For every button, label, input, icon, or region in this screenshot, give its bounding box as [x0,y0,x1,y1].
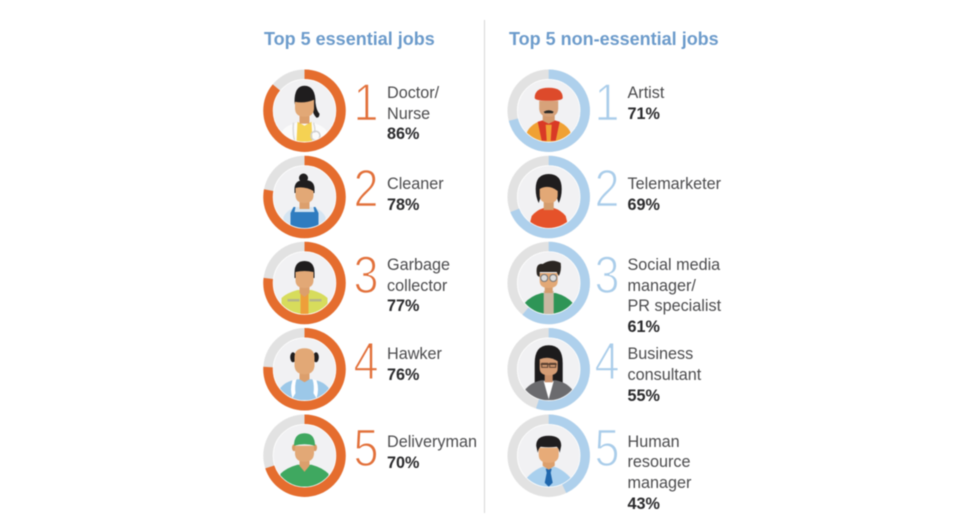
label: doctor/nurse: Nurse [387,105,430,123]
icon: social media manager [525,261,573,314]
label: social media manager/PR specialist: PR specialist [628,297,722,315]
label: hawker [387,345,442,384]
label: social media manager/PR specialist: 61% [628,318,660,336]
ring: 71% [512,74,585,147]
row: deliveryman [268,419,477,492]
label: cleaner: Cleaner [387,175,444,193]
number 3: 3 [353,246,378,305]
label: garbage collector: 77% [387,297,419,315]
icon: business consultant [525,345,573,400]
label: social media manager/PR specialist [628,256,722,336]
ring: 55% [512,333,585,406]
ring: 78% [268,160,341,234]
label: business consultant: Business [628,345,693,363]
label: human resource manager [628,433,692,513]
label: business consultant [628,345,702,405]
label: doctor/nurse: 86% [387,125,419,143]
row: cleaner [268,159,444,234]
ring: 77% [268,246,341,320]
icon: doctor [282,86,328,142]
number 2: 2 [353,159,378,218]
icon: garbage collector [282,261,328,314]
number 5: 5 [353,419,378,478]
ring: 70% [268,419,341,492]
row: business consultant [512,332,702,406]
row: social media manager [512,246,722,336]
number 1: 1 [353,73,378,132]
heading: essential: Top 5 essential jobs [264,29,435,49]
heading: non-essential: Top 5 non-essential jobs [509,29,719,49]
number 1: 1 [594,73,620,132]
label: telemarketer: 69% [628,196,660,214]
label: artist: 71% [628,105,660,123]
number 5: 5 [594,419,620,478]
label: social media manager/PR specialist: Social media [628,256,720,274]
label: human resource manager: Human [628,433,680,451]
label: human resource manager: manager [628,474,692,492]
ring: 43% [512,419,585,492]
number 3: 3 [594,246,620,305]
icon: hawker [280,348,330,400]
label: social media manager/PR specialist: manager/ [628,277,696,295]
number 2: 2 [594,159,620,218]
row: garbage collector [268,246,450,320]
icon: telemarketer [529,174,569,228]
ring: 69% [512,160,585,234]
label: hawker: 76% [387,366,419,384]
icon: artist [527,88,571,142]
number 4: 4 [353,332,378,391]
label: doctor/nurse [387,84,440,143]
panel: essential jobs [264,29,477,492]
label: garbage collector: collector [387,277,448,295]
label: garbage collector: Garbage [387,256,450,274]
icon: deliveryman [280,433,328,487]
row: human resource manager [512,419,692,513]
ring: 61% [512,246,585,320]
ring: 76% [268,333,341,406]
label: telemarketer: Telemarketer [628,175,722,193]
row: artist [512,73,665,147]
number 4: 4 [594,332,620,391]
label: garbage collector [387,256,450,315]
label: artist: Artist [628,84,665,102]
icon: human resource manager [524,436,574,487]
ring: 86% [268,74,341,147]
panel: non-essential jobs [509,29,722,513]
label: doctor/nurse: Doctor/ [387,84,440,102]
row: doctor/nurse [268,73,440,147]
label: business consultant: consultant [628,366,702,384]
icon: cleaner [284,174,326,228]
label: business consultant: 55% [628,387,660,405]
label: deliveryman: 70% [387,454,419,472]
row: hawker [268,332,442,406]
label: deliveryman [387,433,477,472]
label: cleaner: 78% [387,196,419,214]
label: human resource manager: resource [628,453,690,471]
row: telemarketer [512,159,722,234]
label: cleaner [387,175,444,214]
label: deliveryman: Deliveryman [387,433,477,451]
label: artist [628,84,665,123]
label: human resource manager: 43% [628,495,660,513]
label: hawker: Hawker [387,345,442,363]
label: telemarketer [628,175,722,214]
